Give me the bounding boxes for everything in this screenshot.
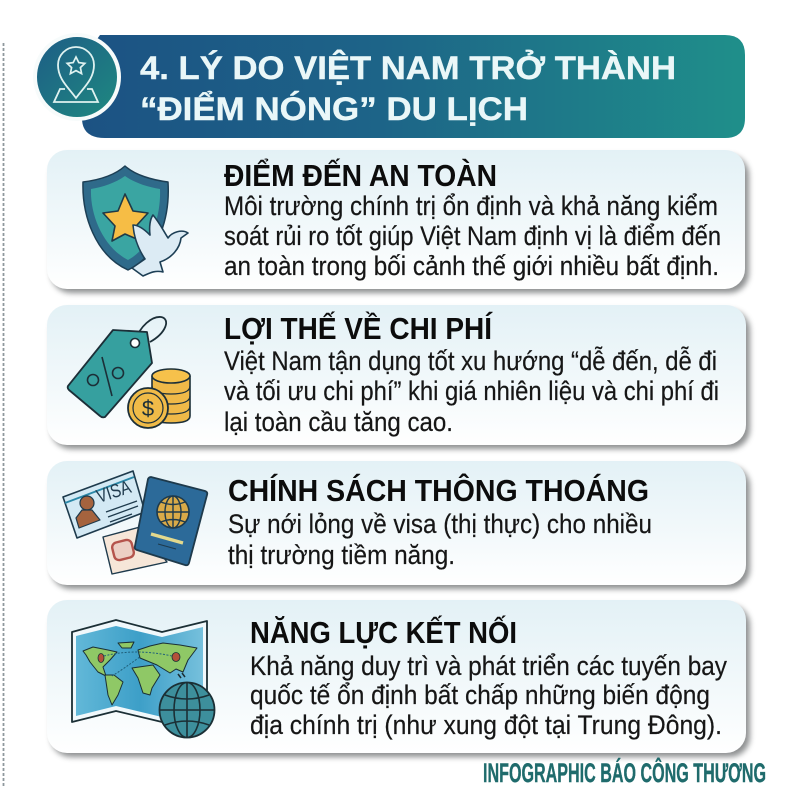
panel: điểm đến an toàn	[47, 150, 749, 293]
body text: Khả năng duy trì và phát triển các tuyến bay	[250, 651, 727, 681]
body text	[224, 191, 721, 281]
banner background	[82, 35, 745, 138]
icon: price tag and coins	[68, 317, 190, 428]
icon: shield with star and dove	[83, 166, 188, 276]
title: “ĐIỂM NÓNG” DU LỊCH	[140, 90, 528, 127]
body text: và tối ưu chi phí” khi giá nhiên liệu và chi phí đi	[224, 376, 719, 406]
title: 4. LÝ DO VIỆT NAM TRỞ THÀNH	[140, 49, 676, 86]
panel: năng lực kết nối	[47, 600, 750, 757]
heading: ĐIỂM ĐẾN AN TOÀN	[224, 158, 497, 193]
dotted margin line	[2, 43, 4, 786]
heading: NĂNG LỰC KẾT NỐI	[250, 614, 517, 650]
body text: địa chính trị (như xung đột tại Trung Đông).	[250, 710, 722, 740]
icon: visa card and passport	[63, 471, 207, 574]
body text	[224, 345, 719, 437]
heading: LỢI THẾ VỀ CHI PHÍ	[224, 311, 493, 346]
title	[140, 49, 676, 127]
panel: lợi thế về chi phí	[47, 305, 750, 449]
panel: chính sách thông thoáng	[47, 461, 750, 589]
header banner	[35, 35, 745, 138]
body text: Việt Nam tận dụng tốt xu hướng “dễ đến, dễ đi	[224, 345, 717, 376]
body text	[228, 509, 652, 570]
body text: thị trường tiềm năng.	[228, 540, 455, 570]
body text: quốc tế ổn định bất chấp những biến động	[250, 680, 710, 710]
body text: soát rủi ro tốt giúp Việt Nam định vị là điểm đến	[224, 221, 721, 251]
body text: Môi trường chính trị ổn định và khả năng kiểm	[224, 191, 718, 221]
icon: map pin with star	[35, 35, 119, 119]
body text	[250, 651, 727, 740]
body text: lại toàn cầu tăng cao.	[224, 407, 453, 437]
body text: an toàn trong bối cảnh thế giới nhiều bất định.	[224, 251, 719, 281]
icon: visa card and passport: VISA	[94, 477, 134, 508]
body text: Sự nới lỏng về visa (thị thực) cho nhiều	[228, 509, 652, 539]
icon: world map and globe	[72, 620, 214, 738]
icon: price tag and coins: $	[142, 396, 154, 421]
heading: CHÍNH SÁCH THÔNG THOÁNG	[228, 472, 649, 508]
